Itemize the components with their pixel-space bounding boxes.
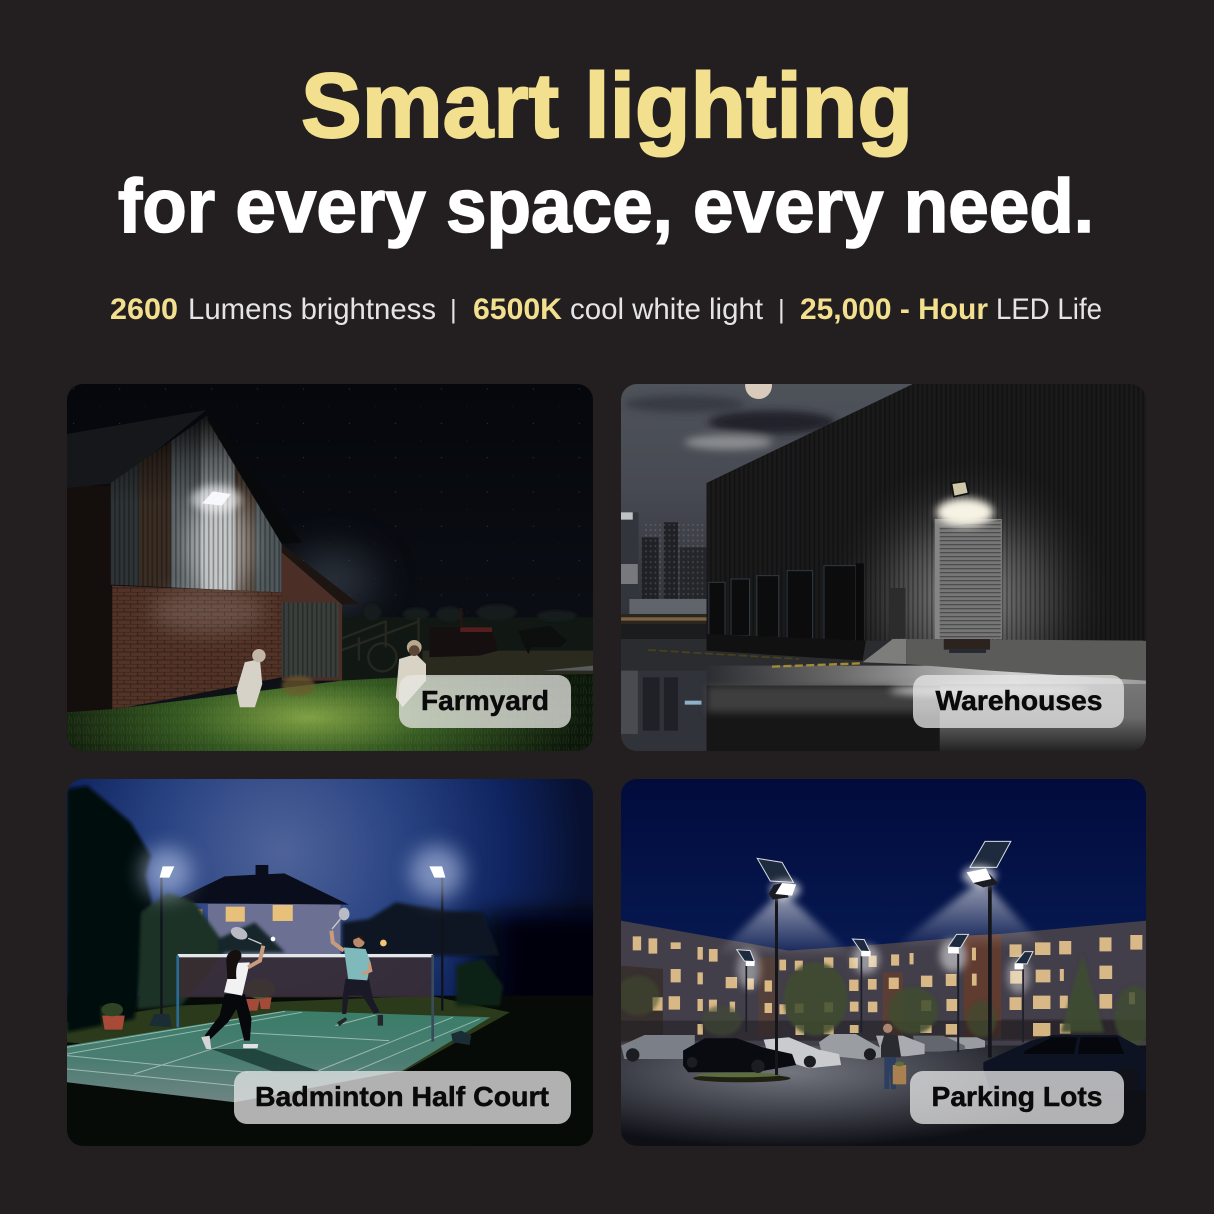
feature line: | (450, 294, 457, 324)
label: Warehouses: Warehouses (936, 685, 1102, 716)
solar lamp posts (737, 841, 1033, 1075)
farmers (236, 640, 426, 707)
grass (67, 674, 593, 751)
feature line: LED Life (996, 293, 1102, 326)
stands (149, 1014, 471, 1045)
male player (331, 908, 383, 1026)
label: Farmyard: Farmyard (421, 685, 549, 716)
feature line: cool white light (570, 293, 764, 326)
female player (201, 925, 275, 1049)
title: Smart lighting (301, 55, 913, 157)
ground (621, 1046, 1147, 1146)
wall lamp (191, 486, 241, 512)
label: Parking Lots: Parking Lots (932, 1081, 1102, 1112)
cart, tractor and buffalo (340, 608, 567, 674)
feature line: Lumens brightness (188, 293, 436, 326)
panel: badminton half court (67, 779, 621, 1152)
label: Parking Lots (910, 1071, 1124, 1124)
feature line: 25,000 - Hour (800, 293, 988, 326)
warehouse building (648, 384, 1147, 681)
light beams (718, 879, 1044, 994)
feature line: 6500K (473, 293, 562, 326)
apartment buildings (621, 921, 1147, 1046)
label: Farmyard (399, 675, 571, 728)
panel: parking lots (616, 779, 1154, 1146)
distant field and tree line (342, 604, 593, 681)
steps (863, 639, 906, 664)
label: Badminton Half Court: Badminton Half Court (255, 1081, 549, 1112)
lamp posts (141, 846, 464, 1014)
trees (67, 786, 154, 1032)
feature line (110, 293, 1102, 326)
court (67, 1011, 490, 1102)
clouds (624, 395, 836, 450)
loading docks (709, 566, 856, 641)
feature line: 2600 (110, 293, 178, 326)
ground (621, 639, 1147, 751)
moon (745, 384, 772, 399)
title: for every space, every need. (118, 164, 1094, 249)
panel: farmyard (67, 384, 593, 751)
barn (67, 408, 359, 712)
roller door and lamp (935, 481, 1002, 639)
planting island (693, 1073, 790, 1082)
hedges (101, 892, 503, 1029)
label: Badminton Half Court (234, 1071, 571, 1124)
lawn (67, 996, 593, 1146)
trees (616, 954, 1154, 1046)
panel: warehouses (621, 372, 1147, 751)
parked cars (621, 1034, 1147, 1091)
title (118, 55, 1094, 249)
feature line: | (778, 294, 785, 324)
house (169, 865, 387, 957)
windows (633, 935, 1142, 1036)
shadows (211, 1049, 322, 1072)
pedestrian (881, 1024, 906, 1089)
net (176, 954, 434, 1042)
city skyline (621, 512, 707, 639)
label: Warehouses (913, 675, 1124, 728)
flower pots (102, 979, 275, 1030)
